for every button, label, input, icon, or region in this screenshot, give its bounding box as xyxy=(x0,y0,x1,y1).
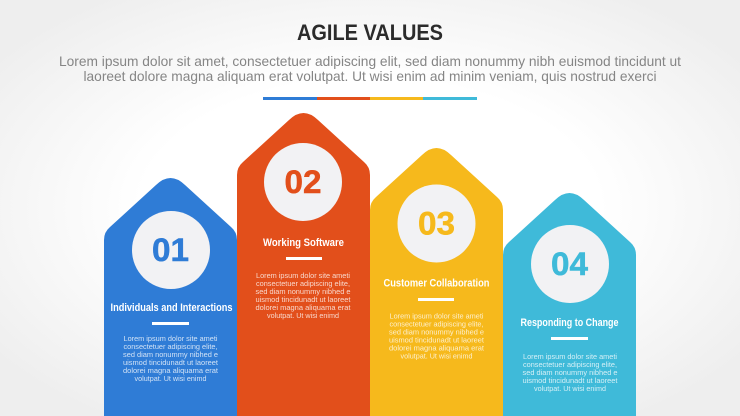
body text xyxy=(256,271,350,320)
number circle 02: 02 xyxy=(284,164,322,200)
body text: consectetuer adipiscing elite, xyxy=(390,320,484,328)
arrow shape teal xyxy=(503,193,636,416)
number circle 01 xyxy=(132,211,210,289)
underline xyxy=(152,322,189,325)
heading: Individuals and Interactions xyxy=(110,302,232,314)
number circle 02 xyxy=(264,143,342,221)
body text: uismod tincidunadt ut laoreet xyxy=(389,336,484,344)
underline xyxy=(418,298,454,301)
body text: Lorem ipsum dolor site ameti xyxy=(523,352,617,361)
body text: Lorem ipsum dolor site ameti xyxy=(256,271,350,280)
number circle 04 xyxy=(531,225,609,303)
body text: volutpat. Ut wisi enimd xyxy=(400,352,472,360)
body text xyxy=(522,352,618,393)
subtitle xyxy=(59,54,681,84)
panel: 04 Responding to Change xyxy=(503,193,636,416)
number circle 04: 04 xyxy=(551,246,588,282)
colour divider xyxy=(263,97,477,100)
body text: uismod tincidunadt ut laoreet xyxy=(522,376,618,385)
arrow shape red xyxy=(237,113,370,416)
body text: sed diam nonummy nibhed e xyxy=(123,350,218,359)
underline xyxy=(551,337,588,340)
underline xyxy=(286,257,322,260)
body text: sed diam nonummy nibhed e xyxy=(256,287,350,296)
number circle 03 xyxy=(398,184,476,262)
heading: Working Software xyxy=(263,237,344,249)
body text: uismod tincidunadt ut laoreet xyxy=(123,358,218,367)
arrow shape blue xyxy=(104,178,237,416)
body text: consectetuer adipiscing elite, xyxy=(124,342,218,351)
number circle 03: 03 xyxy=(418,206,455,242)
body text: dolorei magna aliquama erat xyxy=(123,366,218,375)
title: AGILE VALUES xyxy=(297,20,443,45)
body text: consectetuer adipiscing elite, xyxy=(256,279,350,288)
subtitle: laoreet dolore magna aliquam erat volutpat. Ut wisi enim ad minim veniam, quis nostrud exerci xyxy=(84,69,656,84)
body text: dolorei magna aliquama erat xyxy=(389,344,484,352)
number circle 01: 01 xyxy=(152,232,189,268)
body text: dolorei magna aliquama erat xyxy=(256,303,350,312)
body text xyxy=(389,312,484,360)
body text: volutpat. Ut wisi enimd xyxy=(534,384,606,393)
body text: Lorem ipsum dolor site ameti xyxy=(390,312,484,320)
panel: 03 Customer Collaboration xyxy=(370,148,503,416)
panel: 02 Working Software xyxy=(237,113,370,416)
arrow shape yellow xyxy=(370,148,503,416)
panel: 01 Individuals and Interactions xyxy=(104,178,237,416)
body text: volutpat. Ut wisi enimd xyxy=(267,311,339,320)
body text xyxy=(123,334,218,383)
body text: Lorem ipsum dolor site ameti xyxy=(124,334,218,343)
subtitle: Lorem ipsum dolor sit amet, consectetuer adipiscing elit, sed diam nonummy nibh euismod tincidunt ut xyxy=(59,54,681,69)
body text: sed diam nonummy nibhed e xyxy=(522,368,618,377)
heading: Customer Collaboration xyxy=(384,278,490,290)
heading: Responding to Change xyxy=(520,317,618,329)
body text: sed diam nonummy nibhed e xyxy=(389,328,484,336)
body text: consectetuer adipiscing elite, xyxy=(523,360,617,369)
body text: uismod tincidunadt ut laoreet xyxy=(256,295,350,304)
body text: volutpat. Ut wisi enimd xyxy=(134,374,206,383)
